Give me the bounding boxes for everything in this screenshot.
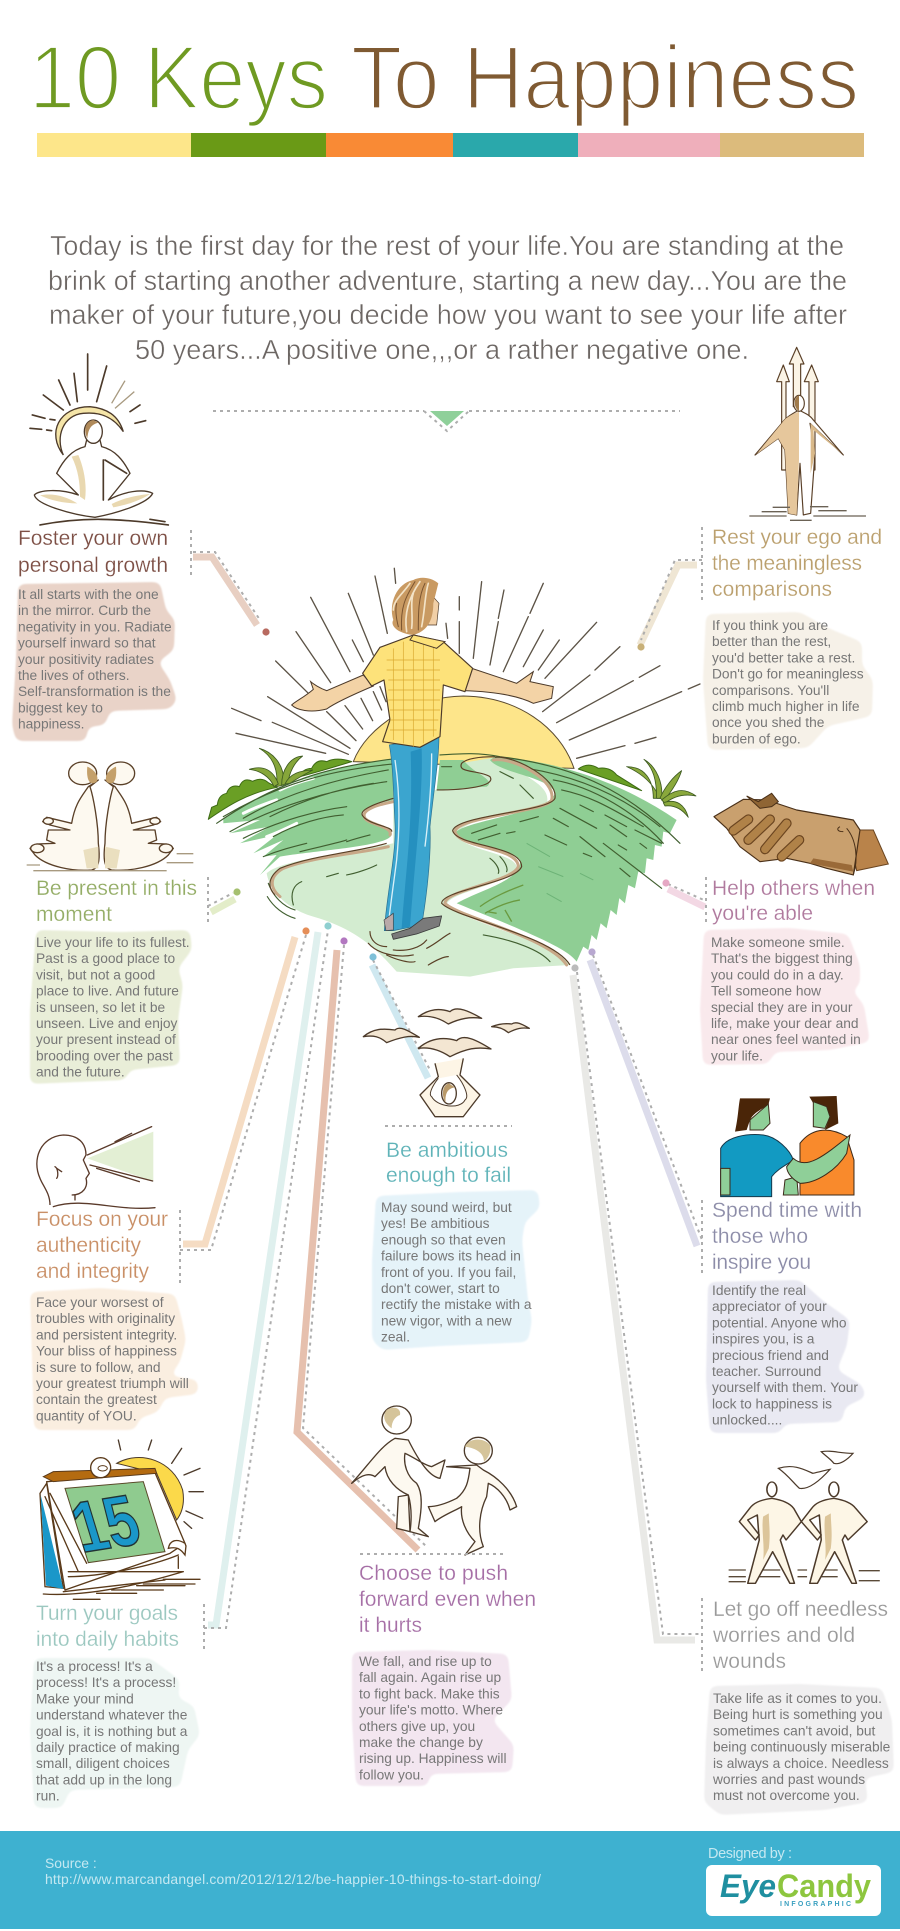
body text: burden of ego.	[712, 731, 801, 746]
body text	[706, 1280, 866, 1433]
body text: to fight back. Make this	[359, 1686, 500, 1701]
heading: authenticity	[36, 1234, 142, 1257]
body text: in the mirror. Curb the	[18, 603, 151, 618]
connector: goals	[204, 922, 332, 1650]
body text	[30, 1658, 200, 1808]
body text: Don't go for meaningless	[712, 667, 864, 682]
icon: clasped hands	[714, 793, 888, 875]
body text: yes! Be ambitious	[381, 1216, 490, 1231]
heading: Choose to push	[359, 1562, 508, 1585]
body text: place to live. And future	[36, 984, 179, 999]
body text: understand whatever the	[36, 1708, 188, 1723]
body text	[700, 928, 870, 1065]
body text: lock to happiness is	[712, 1396, 832, 1411]
footer	[0, 1831, 900, 1929]
connector: be present	[208, 877, 241, 925]
icon: one child helping another	[352, 1406, 517, 1555]
heading: you're able	[712, 902, 813, 925]
heading	[18, 527, 168, 577]
body text: you'd better take a rest.	[712, 650, 855, 665]
body text: and persistent integrity.	[36, 1327, 177, 1342]
body text: goal is, it is nothing but a	[36, 1724, 188, 1739]
icon: man with arrows	[749, 347, 866, 520]
heading: Focus on your	[36, 1208, 168, 1231]
body text: It all starts with the one	[18, 587, 159, 602]
colour bar	[37, 133, 864, 157]
heading	[712, 1199, 862, 1274]
heading: those who	[712, 1225, 808, 1248]
body text: yourself with them. Your	[712, 1380, 858, 1395]
heading	[36, 1602, 179, 1651]
heading: the meaningless	[712, 552, 862, 575]
body text: quantity of YOU.	[36, 1408, 137, 1423]
body text: run.	[36, 1789, 60, 1804]
logo	[706, 1865, 881, 1916]
intro text: Today is the first day for the rest of your life.You are standing at the	[50, 230, 844, 261]
body text: sometimes can't avoid, but	[713, 1723, 876, 1738]
panel: let go off needless worries	[704, 1451, 894, 1815]
body text	[30, 930, 192, 1084]
body text: your greatest triumph will	[36, 1376, 189, 1391]
body text: others give up, you	[359, 1719, 475, 1734]
heading	[386, 1139, 511, 1187]
body text: life, make your dear and	[711, 1016, 859, 1031]
body text: is always a choice. Needless	[713, 1756, 889, 1771]
body text: brooding over the past	[36, 1048, 173, 1063]
heading: Foster your own	[18, 527, 168, 550]
heading: Be present in this	[36, 877, 197, 900]
connector: focus	[180, 927, 310, 1283]
body text: visit, but not a good	[36, 967, 155, 982]
body text: your present instead of	[36, 1032, 176, 1047]
heading: and integrity	[36, 1260, 150, 1283]
panel: help others when you're able	[700, 793, 888, 1065]
person	[292, 578, 553, 939]
body text: must not overcome you.	[713, 1788, 860, 1803]
body text: don't cower, start to	[381, 1281, 500, 1296]
heading	[712, 877, 875, 925]
body text: follow you.	[359, 1767, 424, 1782]
intro text: 50 years...A positive one,,,or a rather negative one.	[135, 334, 749, 365]
body text: inspires you, is a	[712, 1332, 815, 1347]
body text: Face your worsest of	[36, 1295, 164, 1310]
body text: rectify the mistake with a	[381, 1297, 532, 1312]
heading: Turn your goals	[36, 1602, 178, 1625]
body text: Make someone smile.	[711, 935, 845, 950]
body text: front of you. If you fail,	[381, 1265, 516, 1280]
icon: two friends with arm around shoulder	[721, 1096, 854, 1197]
body text: We fall, and rise up to	[359, 1654, 492, 1669]
heading	[36, 1208, 168, 1283]
body text: It's a process! It's a	[36, 1659, 153, 1674]
title	[29, 28, 859, 128]
body text: Make your mind	[36, 1691, 134, 1706]
palm and bushes	[208, 748, 696, 819]
central illustration: person facing the sunrise	[208, 568, 700, 977]
body text	[30, 1288, 198, 1430]
heading: Rest your ego and	[712, 526, 882, 549]
heading: it hurts	[359, 1614, 422, 1637]
body text: new vigor, with a new	[381, 1313, 512, 1328]
body text: May sound weird, but	[381, 1200, 512, 1215]
panel: choose to push forward even when it hurts	[352, 1406, 536, 1786]
panel: spend time with those who inspire you	[706, 1096, 866, 1433]
heading: Let go off needless	[713, 1598, 888, 1621]
panel: foster your own personal growth	[12, 354, 177, 741]
body text: contain the greatest	[36, 1392, 157, 1407]
sun rays	[232, 568, 700, 758]
body text: that add up in the long	[36, 1772, 172, 1787]
body text: near ones feel wanted in	[711, 1032, 861, 1047]
heading: into daily habits	[36, 1628, 179, 1651]
heading: enough to fail	[386, 1164, 511, 1187]
heading: personal growth	[18, 554, 168, 577]
intro text	[48, 230, 847, 365]
heading	[712, 1598, 888, 1673]
body text: your life.	[711, 1048, 763, 1063]
heading	[36, 877, 197, 926]
logo: Eye	[720, 1868, 776, 1904]
body text: make the change by	[359, 1735, 483, 1750]
icon: meditating figure with halo	[30, 354, 168, 525]
connector: let go	[571, 964, 702, 1672]
title: To Happiness	[351, 28, 859, 128]
heading: Help others when	[712, 877, 875, 900]
heading: moment	[36, 903, 112, 926]
body text: your positivity radiates	[18, 652, 154, 667]
panel: rest your ego	[703, 347, 882, 750]
intro text: brink of starting another adventure, starting a new day...You are the	[48, 265, 847, 296]
body text: the lives of others.	[18, 668, 130, 683]
panel: be present in this moment	[27, 762, 197, 1084]
body text: being continuously miserable	[713, 1740, 891, 1755]
divider	[360, 1553, 507, 1555]
body text: small, diligent choices	[36, 1756, 170, 1771]
body text: Being hurt is something you	[713, 1707, 883, 1722]
body text: Self-transformation is the	[18, 684, 171, 699]
connector: foster	[191, 530, 270, 636]
body text: comparisons. You'll	[712, 683, 829, 698]
body text: Your bliss of happiness	[36, 1344, 177, 1359]
body text: special they are in your	[711, 1000, 853, 1015]
icon: two standing men with doves	[729, 1451, 880, 1583]
icon: calendar with sun: 15	[63, 1480, 149, 1568]
body text: worries and past wounds	[712, 1772, 865, 1787]
body text: failure bows its head in	[381, 1249, 521, 1264]
body text	[372, 1190, 540, 1350]
icon: birds above raised arms	[363, 1009, 529, 1117]
body text: better than the rest,	[712, 634, 831, 649]
body text: zeal.	[381, 1330, 410, 1345]
body text: happiness.	[18, 717, 85, 732]
source credit: Source :	[45, 1855, 97, 1871]
heading: inspire you	[712, 1251, 811, 1274]
body text: process! It's a process!	[36, 1675, 176, 1690]
body text: Tell someone how	[711, 984, 821, 999]
body text: precious friend and	[712, 1348, 829, 1363]
body text: enough so that even	[381, 1232, 506, 1247]
body text: If you think you are	[712, 618, 829, 633]
body text	[703, 612, 873, 750]
body text: teacher. Surround	[712, 1364, 821, 1379]
body text: once you shed the	[712, 715, 825, 730]
heading: worries and old	[712, 1624, 855, 1647]
body text: is unseen, so let it be	[36, 1000, 166, 1015]
body text: rising up. Happiness will	[359, 1751, 506, 1766]
body text	[12, 582, 177, 741]
intro text: maker of your future,you decide how you want to see your life after	[49, 299, 847, 330]
body text: yourself inward so that	[18, 636, 156, 651]
designer credit: Designed by :	[708, 1846, 792, 1862]
body text	[352, 1650, 514, 1786]
body text: you could do in a day.	[711, 967, 844, 982]
body text: is sure to follow, and	[36, 1360, 161, 1375]
divider	[385, 1125, 512, 1127]
body text: That's the biggest thing	[711, 951, 853, 966]
icon: calendar with sun	[40, 1440, 203, 1599]
body text: climb much higher in life	[712, 699, 860, 714]
connector: rest your ego	[637, 527, 702, 651]
body text: Live your life to its fullest.	[36, 935, 190, 950]
connector: spend time	[588, 948, 702, 1275]
body text: negativity in you. Radiate	[18, 619, 172, 634]
icon: head with vision beam	[37, 1127, 155, 1208]
body text: your life's motto. Where	[359, 1703, 503, 1718]
body text: Past is a good place to	[36, 951, 175, 966]
divider with green arrow	[213, 411, 680, 431]
heading	[359, 1562, 536, 1637]
panel: be ambitious enough to fail	[363, 1009, 540, 1350]
connector: ambitious	[369, 953, 430, 1078]
source credit	[45, 1855, 541, 1887]
body text: unseen. Live and enjoy	[36, 1016, 178, 1031]
body text: troubles with originality	[36, 1311, 175, 1326]
body text: fall again. Again rise up	[359, 1670, 502, 1685]
sun	[353, 696, 574, 768]
heading: comparisons	[712, 578, 832, 601]
logo: INFOGRAPHIC	[780, 1901, 851, 1908]
body text: and the future.	[36, 1065, 125, 1080]
body text: Take life as it comes to you.	[713, 1691, 882, 1706]
body text: potential. Anyone who	[712, 1315, 847, 1330]
heading: wounds	[712, 1650, 786, 1673]
panel: focus on your authenticity and integrity	[30, 1127, 198, 1430]
title: 10 Keys	[29, 28, 328, 128]
body text: appreciator of your	[712, 1299, 827, 1314]
body text: Identify the real	[712, 1283, 806, 1298]
body text: daily practice of making	[36, 1740, 180, 1755]
panel: turn your goals into daily habits	[30, 1440, 203, 1808]
body text: unlocked....	[712, 1413, 782, 1428]
hill and path	[217, 754, 680, 977]
icon: two seated figures back to back	[27, 762, 193, 871]
heading: Spend time with	[712, 1199, 862, 1222]
heading	[712, 526, 882, 601]
connector: help others	[662, 877, 706, 925]
heading: Be ambitious	[386, 1139, 508, 1162]
connector: choose	[297, 937, 428, 1550]
body text	[704, 1684, 894, 1815]
body text: biggest key to	[18, 700, 103, 715]
source credit: http://www.marcandangel.com/2012/12/12/be-happier-10-things-to-start-doing/	[45, 1871, 541, 1887]
logo: Candy	[777, 1868, 871, 1904]
heading: forward even when	[359, 1588, 536, 1611]
